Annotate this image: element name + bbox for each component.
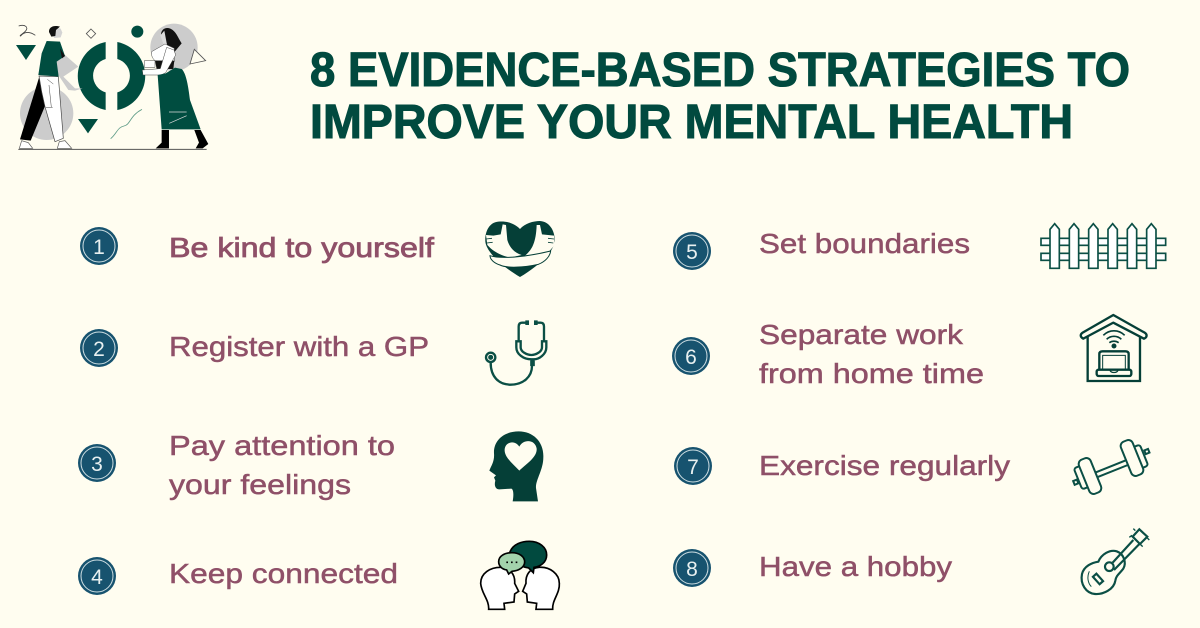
item 3 label [169, 430, 395, 500]
item 6 label [759, 319, 984, 389]
item 7 number badge: 7 [687, 456, 699, 479]
icon: heart hugging itself [485, 221, 555, 277]
item 4 label: Keep connected [169, 558, 398, 589]
item 1 number badge: 1 [93, 236, 105, 259]
item 3 label: Pay attention to [169, 430, 395, 461]
item 6 label: Separate work [759, 319, 964, 350]
icon: house with wifi and laptop [1081, 315, 1147, 381]
item 3 number badge: 3 [91, 453, 103, 476]
item 8 number badge: 8 [686, 558, 698, 581]
item 1 label: Be kind to yourself [169, 232, 434, 263]
item 2 label: Register with a GP [169, 331, 429, 362]
item 6 label: from home time [759, 358, 984, 389]
icon: guitar [1082, 529, 1149, 594]
item 3 label: your feelings [169, 469, 351, 500]
item 8 label: Have a hobby [759, 551, 952, 582]
icon: stethoscope [486, 320, 546, 385]
item 2 number badge: 2 [93, 338, 105, 361]
item 4 number badge: 4 [91, 566, 103, 589]
item 5 label: Set boundaries [759, 228, 970, 259]
item 7 label: Exercise regularly [759, 450, 1010, 481]
item 6 number badge: 6 [685, 346, 697, 369]
title [310, 44, 1130, 149]
icon: two heads talking [481, 541, 559, 609]
icon: dumbbell [1073, 439, 1149, 495]
man [19, 26, 83, 148]
item 3 number badge [78, 444, 116, 482]
item 4 number badge [78, 557, 116, 595]
item 6 number badge [672, 337, 710, 375]
item 5 number badge: 5 [686, 241, 698, 264]
icon: fence [1041, 224, 1166, 268]
illustration: two people holding a split ring [16, 24, 208, 149]
item 7 number badge [674, 447, 712, 485]
item 5 number badge [673, 232, 711, 270]
woman [142, 28, 208, 148]
item 2 number badge [80, 329, 118, 367]
icon: head with heart [489, 431, 543, 501]
item 1 number badge [80, 227, 118, 265]
title: 8 EVIDENCE-BASED STRATEGIES TO [310, 44, 1130, 97]
item 8 number badge [673, 549, 711, 587]
title: IMPROVE YOUR MENTAL HEALTH [310, 96, 1073, 149]
